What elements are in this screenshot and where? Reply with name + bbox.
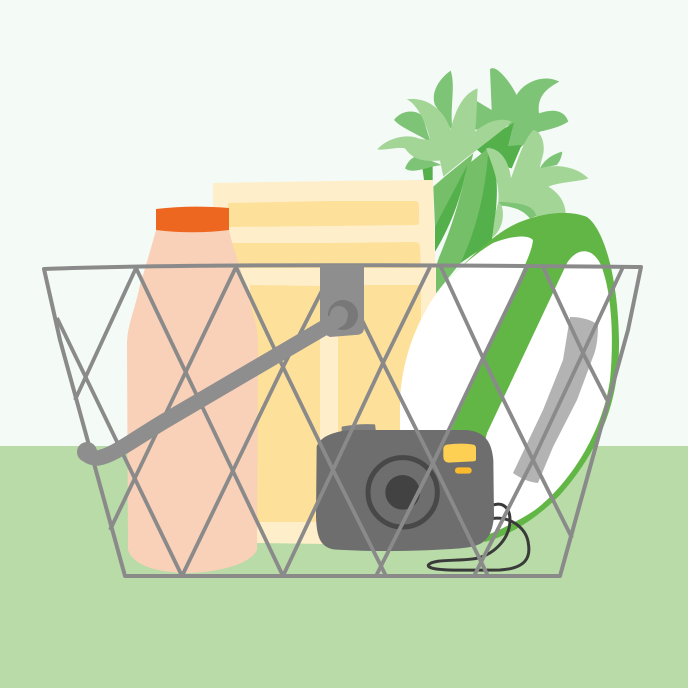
camera strap (428, 504, 529, 570)
handle mount ring centre (330, 306, 348, 324)
box main panel right (338, 285, 421, 522)
handle mount (320, 265, 364, 337)
box main panel left (250, 285, 320, 522)
basket wires (44, 265, 641, 576)
vegetable leaves (377, 68, 588, 293)
basket handle (77, 265, 364, 462)
camera flash (443, 444, 476, 463)
ball white left panel (400, 236, 533, 500)
ground (0, 446, 688, 688)
camera indicator light (455, 467, 472, 474)
camera body (316, 430, 494, 551)
handle bar (86, 319, 339, 458)
bottle cap (156, 207, 229, 232)
box label stripe two (228, 242, 421, 268)
milk bottle (127, 207, 258, 573)
box label stripe one (228, 201, 419, 227)
ball grey patch (513, 317, 598, 483)
camera lens (368, 458, 437, 527)
camera top button (342, 424, 376, 432)
cereal box (213, 180, 436, 545)
basket frame (44, 265, 641, 576)
ball white right panel (470, 251, 612, 535)
camera (316, 424, 529, 570)
background wall (0, 0, 688, 446)
handle end (77, 442, 97, 462)
ball (400, 213, 619, 542)
handle mount ring (328, 300, 358, 330)
ball green outline (440, 213, 619, 542)
